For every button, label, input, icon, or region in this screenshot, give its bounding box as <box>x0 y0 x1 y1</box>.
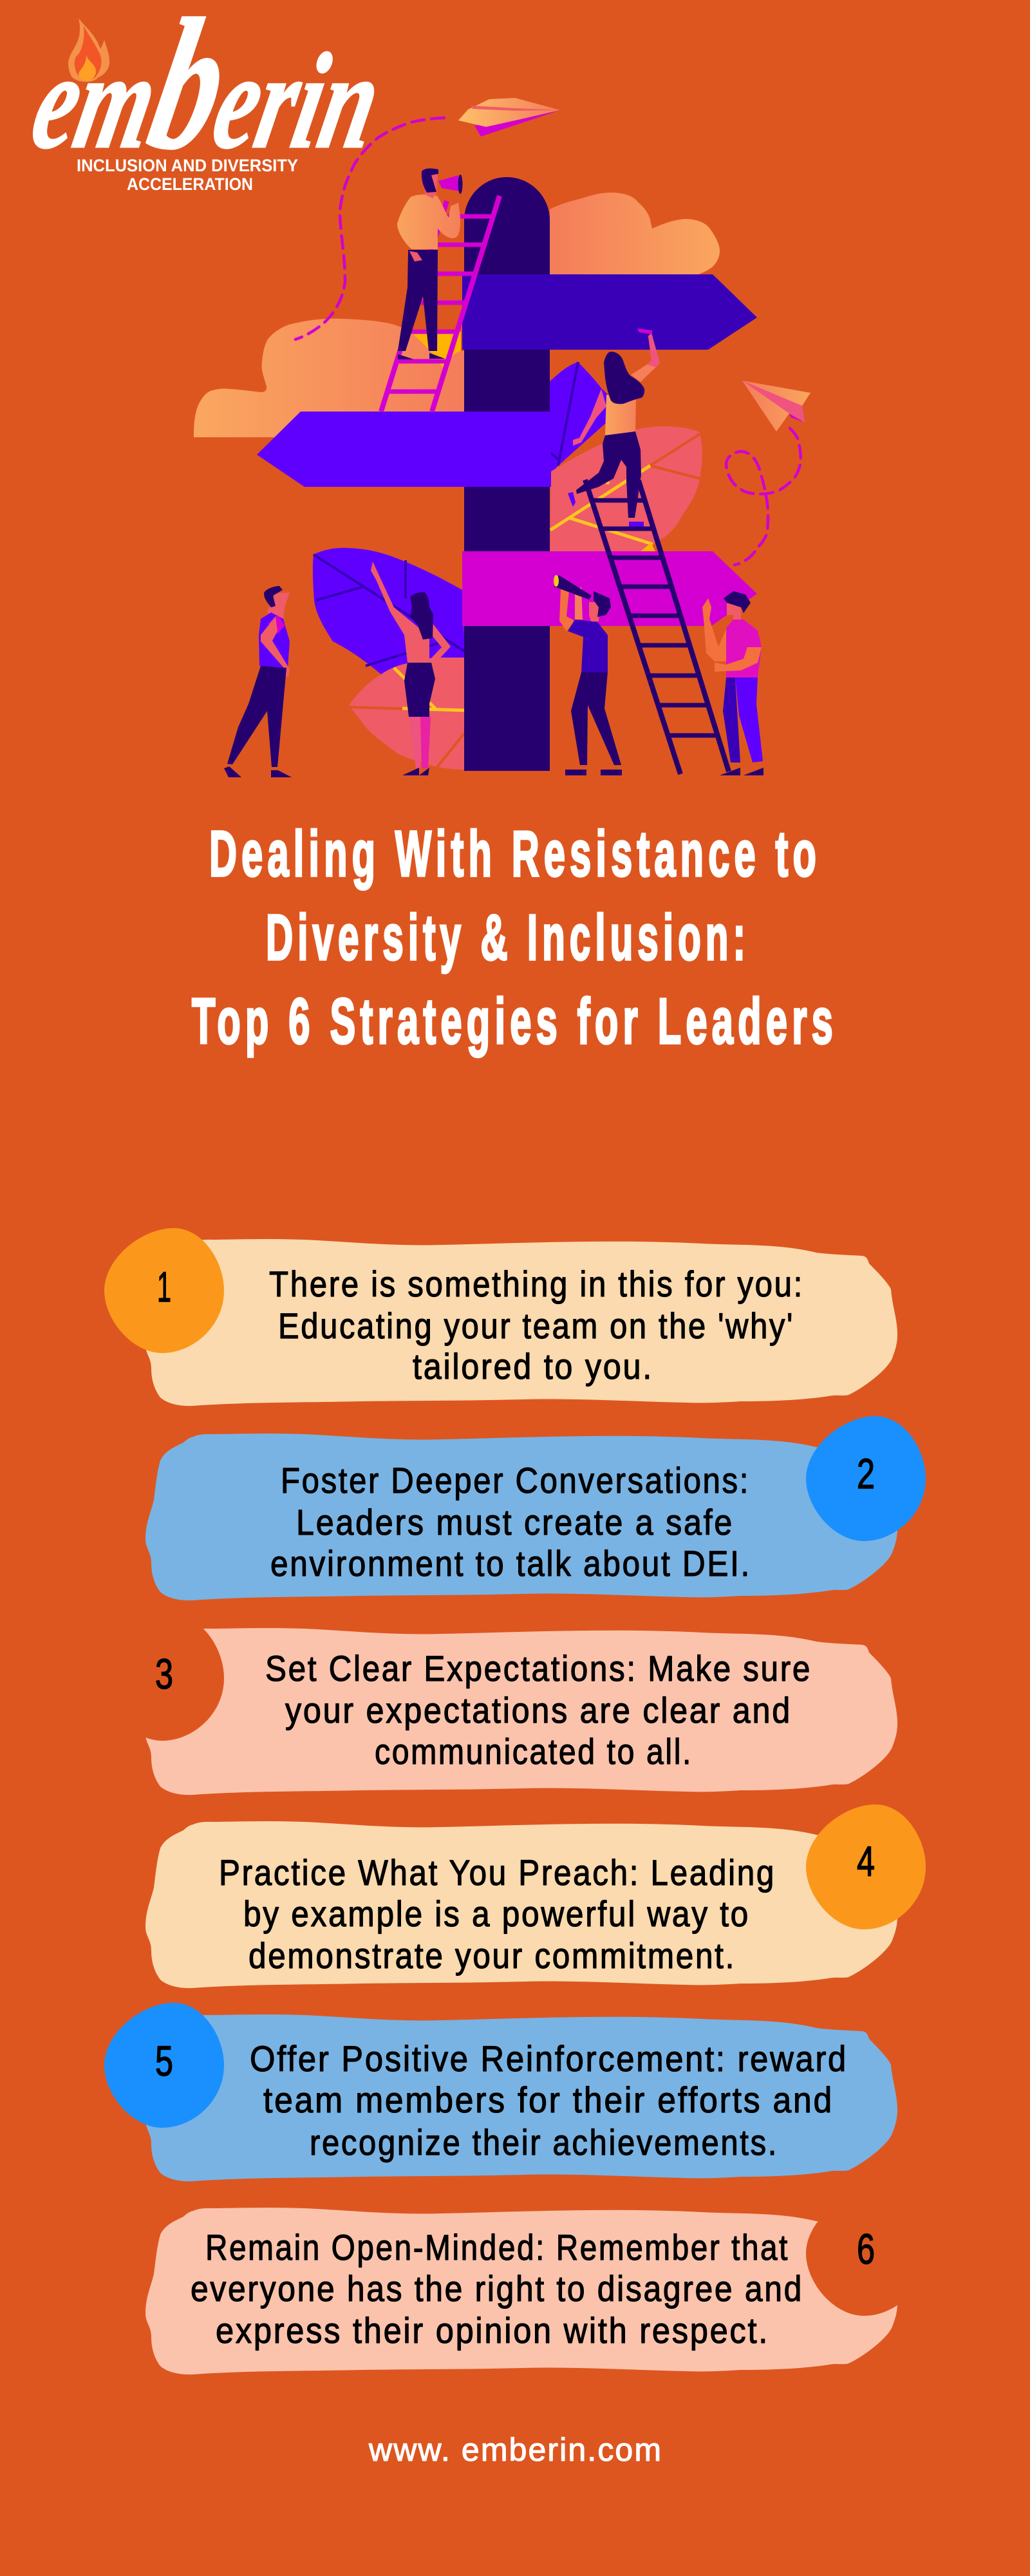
text 6: express their opinion with respect. <box>216 2310 769 2351</box>
signpost pole <box>464 177 550 771</box>
text 3: Set Clear Expectations: Make sure <box>265 1648 812 1689</box>
text 2 <box>270 1460 751 1584</box>
text 5: Offer Positive Reinforcement: reward <box>250 2038 848 2079</box>
text 6: everyone has the right to disagree and <box>191 2268 803 2309</box>
text 5: team members for their efforts and <box>263 2079 834 2120</box>
title <box>192 818 838 1057</box>
footer url: www. emberin.com <box>368 2432 661 2468</box>
logo: emberin <box>19 0 402 194</box>
number badge 1 <box>104 1228 224 1353</box>
person: man with megaphone <box>397 168 462 359</box>
number badge 4 <box>806 1804 926 1929</box>
number 1: 1 <box>157 1263 171 1311</box>
panel: strategy 2 <box>145 1416 926 1600</box>
text 2: Foster Deeper Conversations: <box>281 1460 750 1501</box>
cloud left <box>194 319 465 437</box>
text 1: tailored to you. <box>413 1346 653 1387</box>
dashed flight path left <box>295 118 444 339</box>
card 1 shape <box>145 1239 897 1406</box>
text 4 <box>219 1852 776 1976</box>
person: woman pointing up <box>371 562 451 775</box>
text 5 <box>250 2038 848 2163</box>
person: man standing left <box>224 586 292 777</box>
leaf salmon lower <box>349 658 466 770</box>
card 5 shape <box>145 2014 897 2181</box>
text 2: Leaders must create a safe <box>296 1502 734 1542</box>
text 4: Practice What You Preach: Leading <box>219 1852 776 1893</box>
text 1 <box>269 1264 804 1387</box>
person: man with telescope <box>554 575 622 775</box>
number 2: 2 <box>857 1450 875 1497</box>
number badge 3 <box>104 1616 224 1741</box>
text 3: your expectations are clear and <box>285 1690 792 1730</box>
leaf violet top <box>550 362 618 477</box>
text 6: Remain Open-Minded: Remember that <box>205 2227 789 2268</box>
tagline <box>77 156 298 194</box>
panel: strategy 5 <box>104 2003 897 2181</box>
paper plane right <box>742 381 810 431</box>
text 2: environment to talk about DEI. <box>270 1543 751 1584</box>
panel: strategy 1 <box>104 1228 897 1406</box>
arrow sign right blue <box>462 274 757 350</box>
number badge 6 <box>806 2191 926 2316</box>
illustration: signpost with people <box>194 98 810 777</box>
ladder dark <box>585 480 729 774</box>
card 3 shape <box>145 1628 897 1795</box>
number 4: 4 <box>857 1837 875 1885</box>
arrow sign left violet <box>257 412 551 487</box>
text 1: Educating your team on the 'why' <box>278 1305 794 1346</box>
card 4 shape <box>145 1821 897 1988</box>
panel: strategy 3 <box>104 1616 897 1795</box>
person: woman writing on sign <box>568 328 660 527</box>
text 3: communicated to all. <box>375 1731 693 1772</box>
text 4: demonstrate your commitment. <box>248 1935 736 1976</box>
tagline: ACCELERATION <box>127 175 253 194</box>
text 6 <box>191 2227 803 2351</box>
number 5: 5 <box>155 2037 173 2085</box>
cloud left yellow accent <box>412 332 461 370</box>
text 3 <box>265 1648 812 1772</box>
number 3: 3 <box>155 1650 173 1698</box>
number badge 2 <box>806 1416 926 1541</box>
panel: strategy 4 <box>145 1804 926 1988</box>
panel: strategy 6 <box>145 2191 926 2374</box>
text 5: recognize their achievements. <box>310 2122 778 2163</box>
icon: flame <box>68 18 109 82</box>
paper plane top <box>458 98 560 137</box>
number 6: 6 <box>857 2225 875 2273</box>
ladder magenta <box>381 196 500 412</box>
dashed flight path right <box>726 428 801 565</box>
leaf salmon right <box>550 426 702 551</box>
number badge 5 <box>104 2003 224 2128</box>
tagline: INCLUSION AND DIVERSITY <box>77 156 298 175</box>
text 4: by example is a powerful way to <box>243 1893 750 1934</box>
cloud right <box>550 193 720 277</box>
card 6 shape <box>145 2208 897 2374</box>
text 1: There is something in this for you: <box>269 1264 804 1304</box>
card 2 shape <box>145 1434 897 1600</box>
leaf violet lower <box>313 548 465 674</box>
person: man with raised finger <box>702 591 763 775</box>
arrow sign right magenta <box>462 551 757 626</box>
